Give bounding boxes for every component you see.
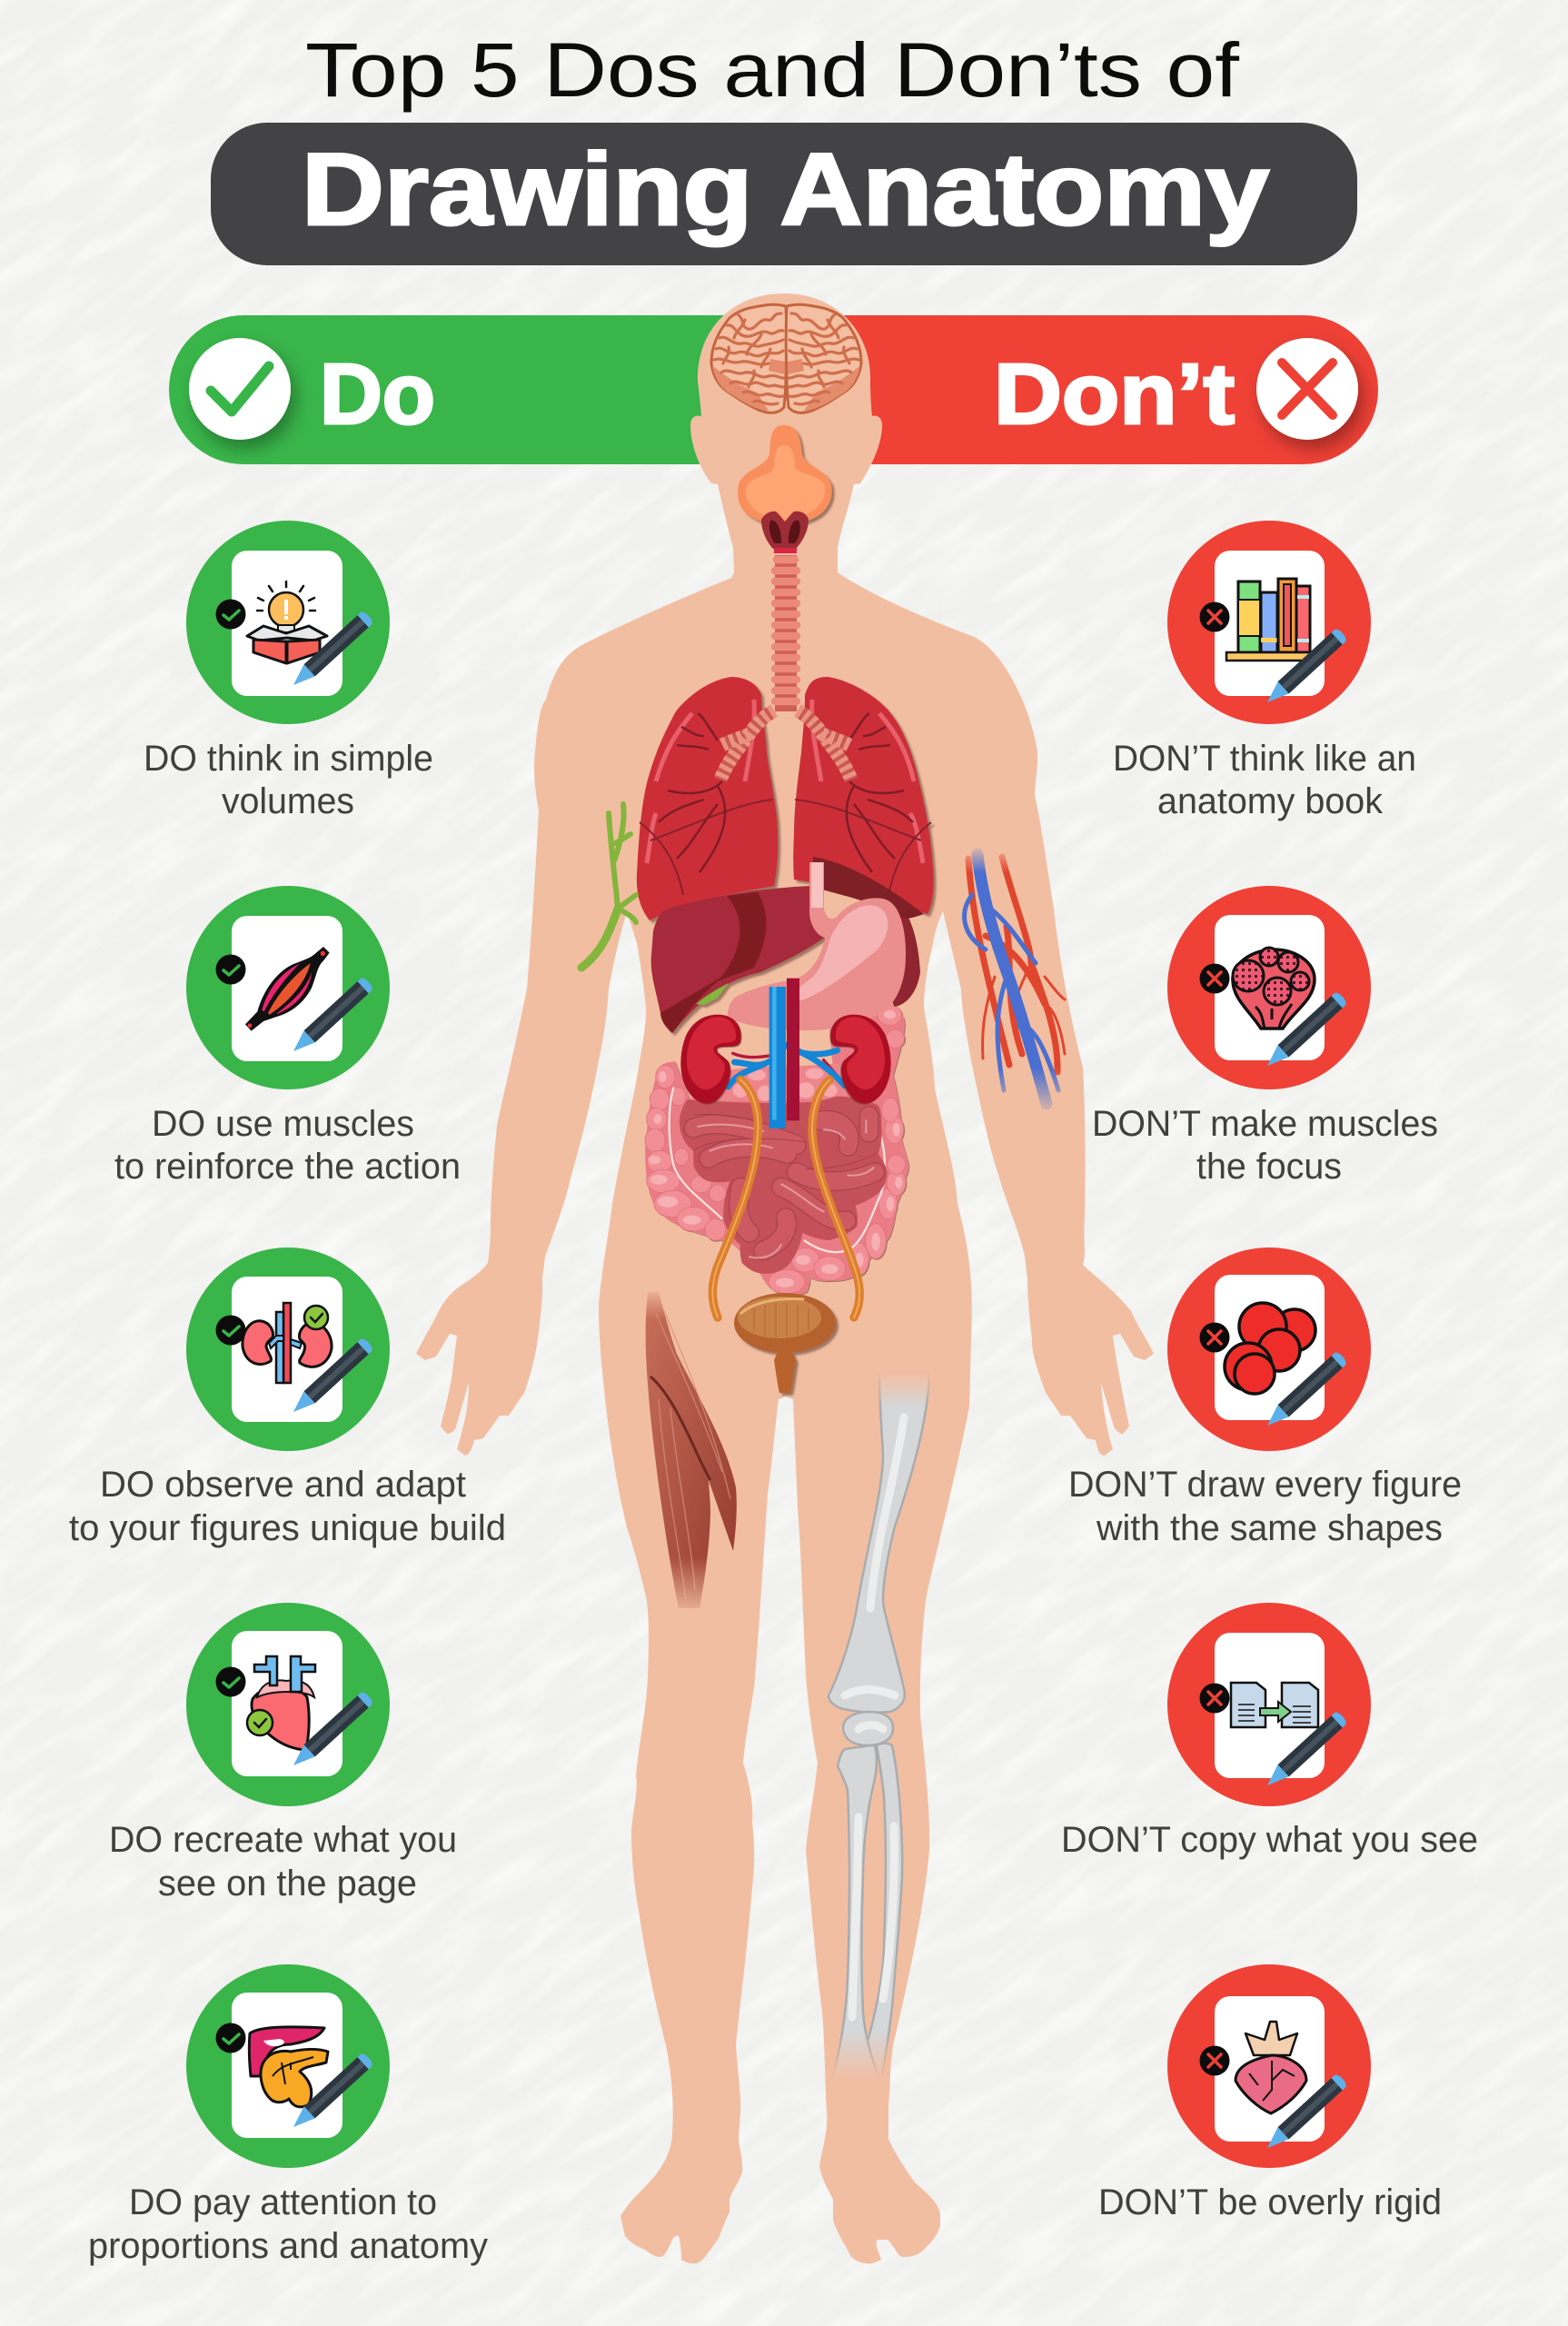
panel: DO observe and adapt — [69, 1247, 506, 1548]
icon: liver and pancreas — [186, 1964, 390, 2168]
header bar: Don't: Don’t — [994, 346, 1235, 442]
right kidney — [830, 1015, 891, 1104]
red artery — [787, 979, 799, 1120]
label: DO use muscles — [152, 1104, 414, 1144]
left lung — [637, 677, 778, 920]
icon: white check circle — [189, 338, 291, 440]
organ: larynx — [761, 512, 809, 553]
transverse colon — [688, 1063, 848, 1101]
leg bones — [829, 1372, 929, 2081]
icon: copied documents — [1167, 1603, 1371, 1806]
icon: anatomical heart — [1167, 1964, 1371, 2168]
ureters — [712, 1079, 859, 1317]
panel: DO think in simple volumes — [144, 521, 433, 821]
label: see on the page — [158, 1864, 417, 1904]
label — [1092, 1104, 1438, 1187]
panel: DON'T copy what you see — [1061, 1603, 1478, 1860]
organ: lower lung shadow — [811, 857, 924, 919]
lymph branch (green) — [581, 804, 636, 968]
panel: DON'T make muscles the focus — [1092, 886, 1438, 1187]
organ: brain — [711, 304, 861, 413]
label: DO observe and adapt — [100, 1465, 466, 1505]
organ: nasal cavity — [738, 425, 832, 527]
label: DON’T be overly rigid — [1098, 2182, 1442, 2222]
icon: muscle — [186, 886, 390, 1089]
icon: kidneys — [186, 1247, 390, 1451]
organ: lungs — [637, 677, 933, 920]
header bar: Do — [169, 315, 790, 464]
icon: circles — [1167, 1247, 1371, 1451]
label — [1068, 1465, 1462, 1548]
panel: DO pay attention to proportions and anatomy — [88, 1964, 488, 2266]
left kidney — [680, 1015, 741, 1104]
renal veins and arteries — [729, 1045, 845, 1087]
icon: muscle cross-section — [1167, 886, 1371, 1089]
organ: stomach — [728, 862, 906, 1030]
label: DON’T think like an — [1113, 739, 1416, 779]
icon: books — [1167, 521, 1371, 724]
label — [1113, 739, 1416, 821]
brain right hemisphere — [786, 304, 861, 413]
organ: renal vessels, aorta and kidneys — [680, 979, 891, 1317]
label — [144, 739, 433, 821]
anatomical body figure — [416, 293, 1154, 2264]
icon: heart — [186, 1603, 390, 1806]
label: volumes — [222, 781, 354, 821]
label — [109, 1820, 457, 1904]
label: with the same shapes — [1096, 1508, 1443, 1548]
label: DON’T make muscles — [1092, 1104, 1438, 1144]
blue vena cava — [769, 987, 786, 1128]
organ: bladder — [734, 1293, 836, 1393]
panel: DO recreate what you see on the page — [109, 1603, 457, 1904]
organ: spleen — [881, 900, 920, 1007]
organ: bronchi — [720, 711, 851, 780]
label: to reinforce the action — [114, 1147, 461, 1187]
arm blood vessels — [965, 854, 1065, 1104]
large intestine — [645, 1003, 908, 1295]
organ: intestines traced group — [645, 1003, 908, 1295]
label — [114, 1104, 461, 1187]
label: DO recreate what you — [109, 1820, 457, 1860]
brain left hemisphere — [711, 304, 787, 413]
right lung — [793, 677, 933, 914]
label: anatomy book — [1157, 781, 1384, 821]
panel: DO use muscles to reinforce the action — [114, 886, 461, 1187]
label: proportions and anatomy — [88, 2226, 488, 2266]
organ: liver — [651, 886, 827, 1033]
label: DO pay attention to — [129, 2182, 437, 2222]
organ: trachea — [775, 555, 797, 711]
label: DON’T draw every figure — [1068, 1465, 1462, 1505]
title banner: Drawing Anatomy: Drawing Anatomy — [302, 133, 1269, 246]
body silhouette — [416, 293, 1154, 2264]
panel: DON'T be overly rigid — [1098, 1964, 1442, 2222]
icon: lightbulb in a box — [186, 521, 390, 724]
label: to your figures unique build — [69, 1508, 506, 1548]
title banner: Drawing Anatomy — [211, 123, 1357, 265]
bronchial branches — [659, 713, 913, 872]
label — [69, 1465, 506, 1548]
label: DON’T copy what you see — [1061, 1820, 1478, 1860]
label: the focus — [1196, 1147, 1342, 1187]
panel: DON'T think like an anatomy book — [1113, 521, 1416, 821]
label — [88, 2182, 488, 2266]
header bar: Don't — [781, 315, 1378, 464]
thigh muscle — [646, 1292, 737, 1608]
label: DO think in simple — [144, 739, 433, 779]
icon: white cross circle — [1256, 338, 1358, 440]
header bar: Do: Do — [320, 346, 435, 442]
small intestine — [680, 1097, 888, 1274]
title: Top 5 Dos and Don'ts of: Top 5 Dos and Don’ts of — [305, 27, 1240, 113]
panel: DON'T draw every figure with the same shapes — [1068, 1247, 1462, 1548]
